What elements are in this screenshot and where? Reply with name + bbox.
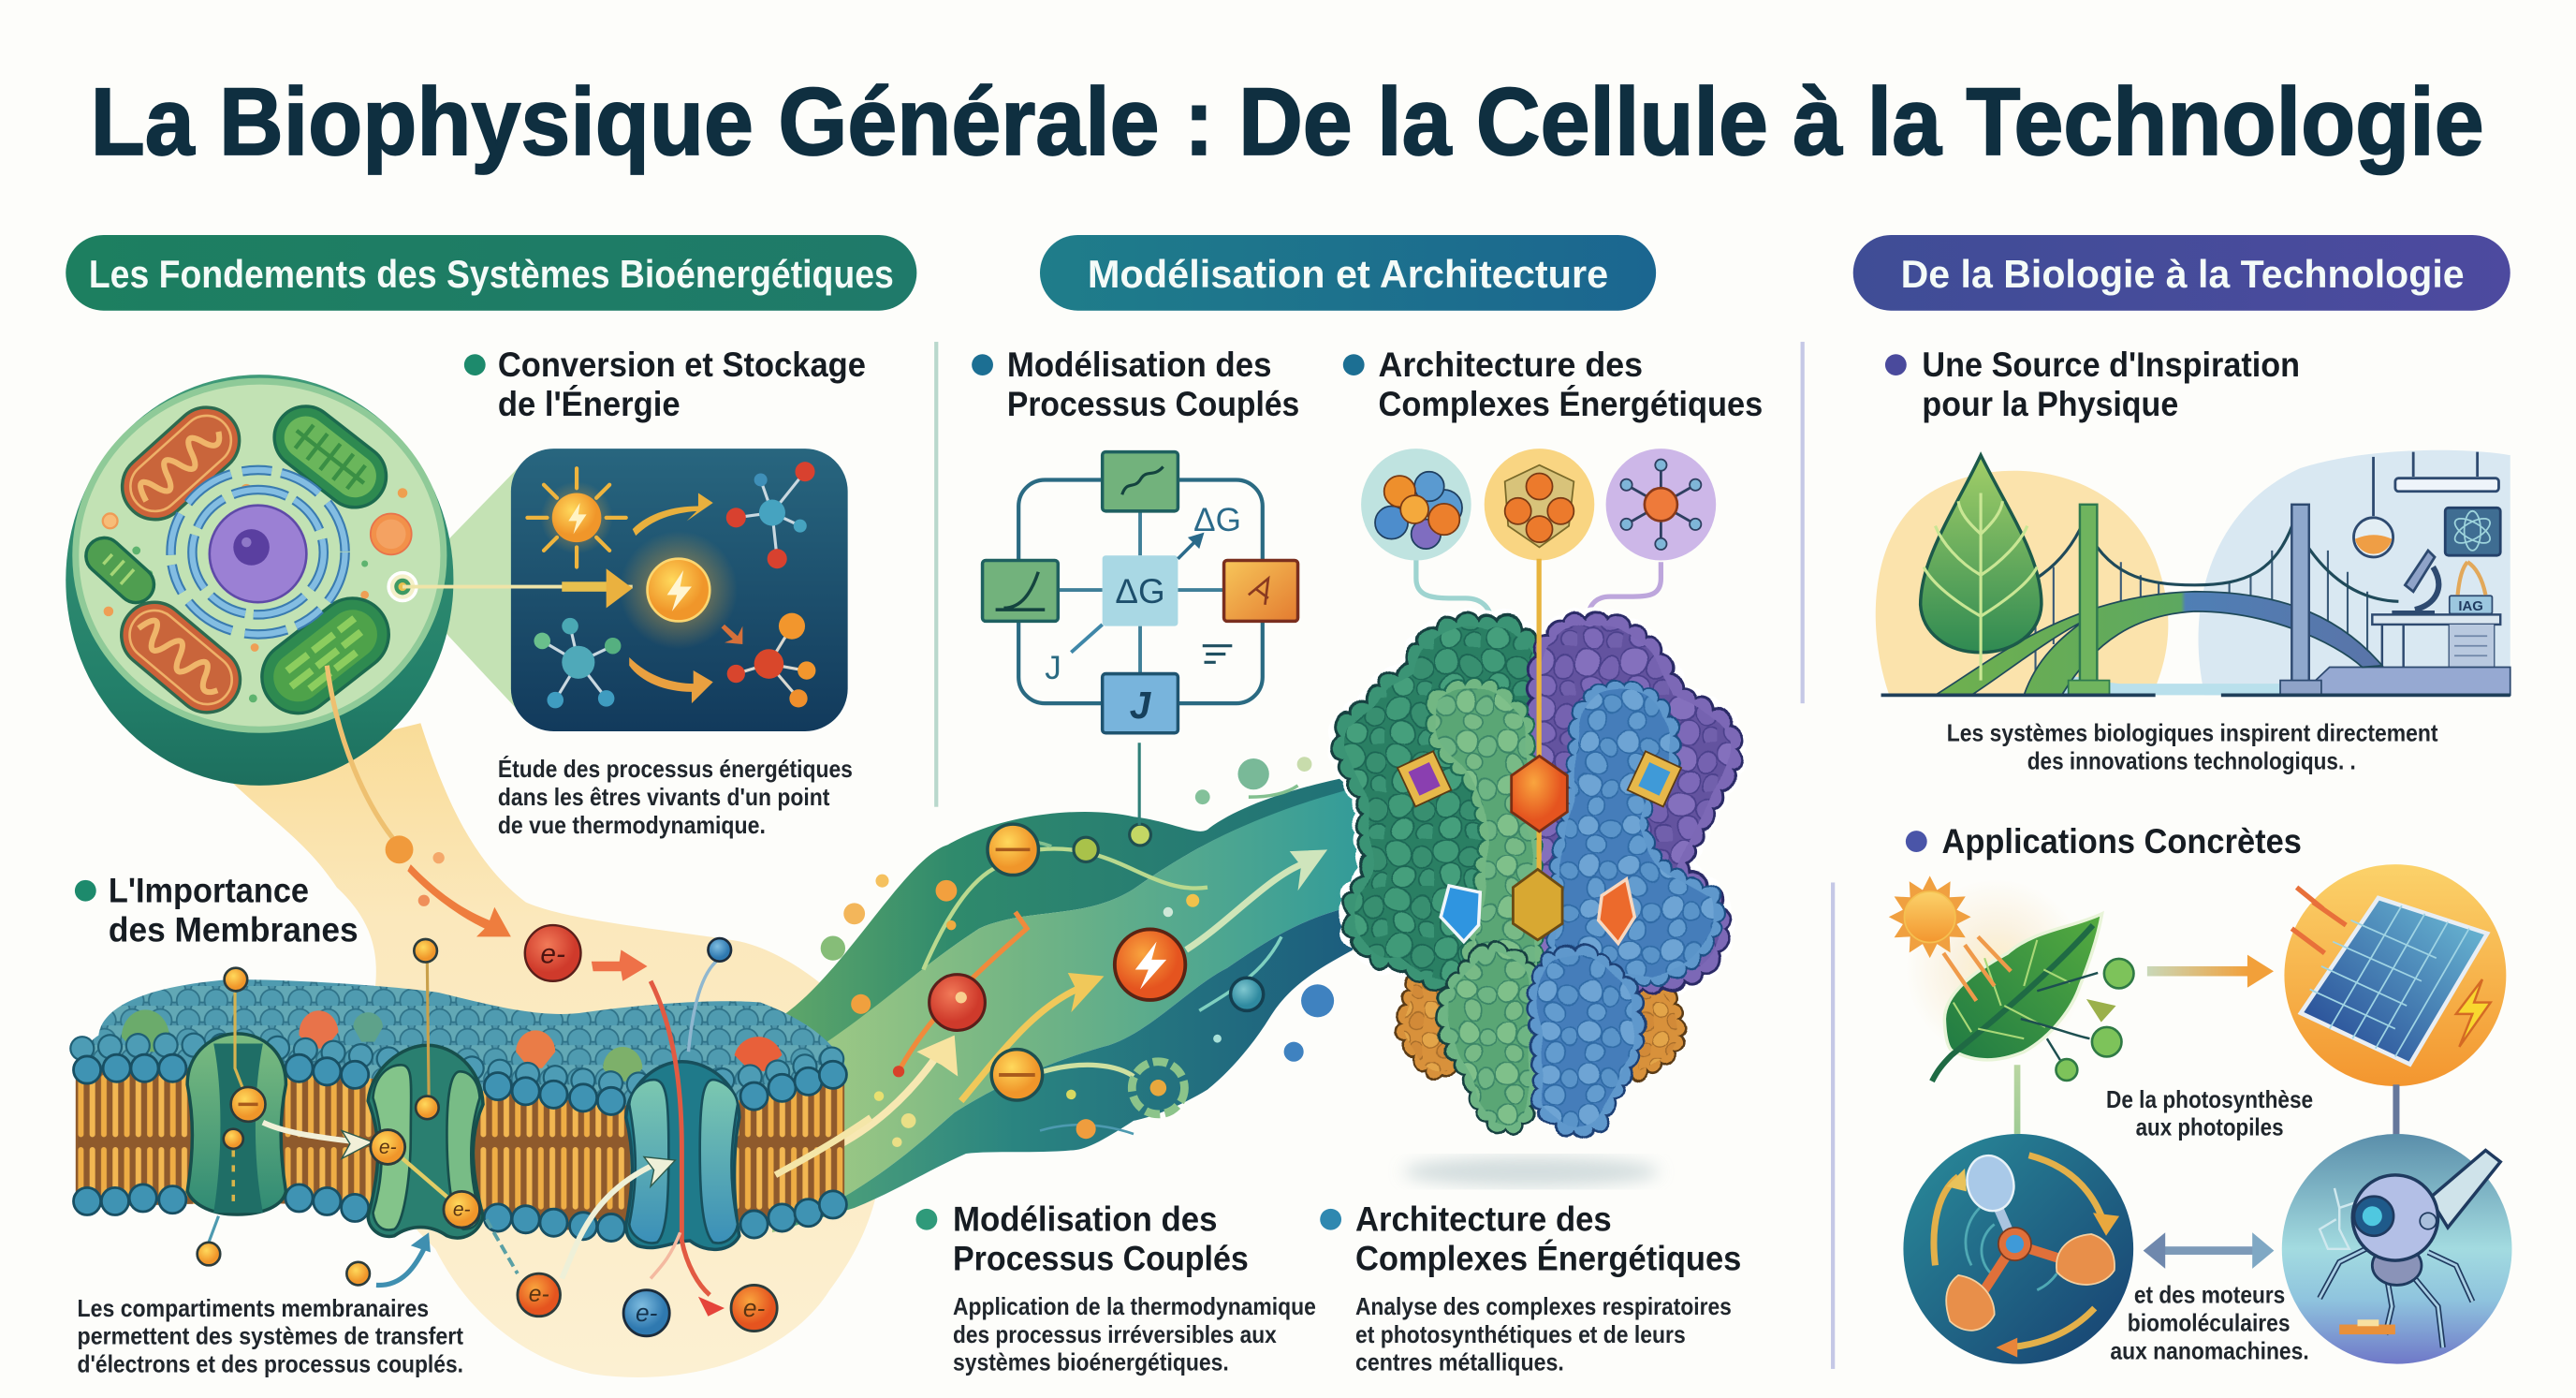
- body text: systèmes biologiques: [1947, 721, 2438, 774]
- chloroplast small: [79, 530, 161, 611]
- bullet and heading: inspiration: pour la Physique: [1922, 385, 2178, 423]
- bullet and heading: conversion: de l'Énergie: [498, 385, 681, 423]
- bullet and heading: inspiration: Une Source d'Inspiration: [1922, 346, 2300, 384]
- arrow: leaf to solar: [2147, 955, 2274, 988]
- section header: biologie technologie: De la Biologie à la Technologie: [1901, 252, 2465, 296]
- body text: analyse: et photosynthétiques et de leurs: [1355, 1322, 1686, 1348]
- bullet and heading: modélisation top: Processus Couplés: [1007, 385, 1299, 423]
- flow ribbon: [772, 773, 1380, 1232]
- protein shadow: [1403, 1157, 1660, 1186]
- section header: modélisation: Modélisation et Architecture: [1088, 252, 1608, 296]
- bullet and heading: conversion: Conversion et Stockage: [498, 346, 866, 384]
- body text: photosynthèse: [2106, 1087, 2313, 1141]
- icon: sun: [527, 468, 626, 567]
- head: [2352, 1175, 2438, 1260]
- flask: [2353, 457, 2393, 557]
- lightning: [2456, 979, 2491, 1047]
- iag label box: IAG: [2458, 599, 2483, 614]
- bullet and heading: modélisation bottom: Processus Couplés: [953, 1240, 1249, 1278]
- embedded proteins: [122, 1009, 782, 1082]
- body text: photosynthèse: aux photopiles: [2136, 1115, 2284, 1141]
- bullet and heading: modélisation top: Modélisation des: [1007, 346, 1271, 384]
- body text: application: Application de la thermodynamique: [953, 1294, 1316, 1320]
- zoom wedge: [402, 468, 518, 710]
- gem: orange: [1599, 879, 1634, 943]
- body text: étude: Étude des processus énergétiques: [498, 756, 853, 783]
- body text: moteurs: aux nanomachines.: [2110, 1338, 2309, 1364]
- section header: modélisation: [1040, 235, 1656, 311]
- bullet and heading: modélisation bottom: Modélisation des: [953, 1200, 1218, 1239]
- rotor arms: [1975, 1191, 2082, 1304]
- solar panel circle: [2284, 864, 2506, 1086]
- arrowheads: [342, 949, 724, 1317]
- wing: [2430, 1151, 2500, 1228]
- coupled process diagram: [983, 452, 1298, 825]
- cluster circle: teal: [1361, 449, 1471, 560]
- connectors: [2014, 1065, 2399, 1136]
- microscope: [2392, 551, 2438, 613]
- halo: [1344, 624, 1731, 983]
- inner blue: [1555, 689, 1713, 977]
- legs: [2320, 1249, 2472, 1347]
- double arrow: [2144, 1232, 2274, 1269]
- particles: e-: [529, 1282, 549, 1307]
- cell to membrane path: [327, 666, 511, 936]
- body text: compartiments: permettent des systèmes de transfert: [78, 1324, 463, 1350]
- endoplasmic reticulum: [171, 470, 345, 634]
- body text: systèmes biologiques: des innovations technologiqus. .: [2027, 748, 2356, 774]
- left dark green lobe: [1344, 626, 1539, 983]
- bullet and heading: applications: Applications Concrètes: [1942, 822, 2302, 861]
- spark: [2339, 1319, 2395, 1334]
- bullet and heading: membranes: [75, 872, 359, 949]
- arrow: sun to molecule: [633, 493, 713, 536]
- bullet and heading: architecture top: Complexes Énergétiques: [1379, 385, 1763, 423]
- lower green: [1447, 953, 1529, 1127]
- body text: analyse: Analyse des complexes respiratoires: [1355, 1294, 1732, 1320]
- body text: systèmes biologiques: Les systèmes biologiques inspirent directement: [1947, 721, 2438, 747]
- bridge illustration: [1876, 450, 2510, 695]
- body text: application: [953, 1294, 1316, 1376]
- box: bottom J: [1103, 674, 1178, 733]
- channel protein 2: [368, 1045, 483, 1238]
- bullet and heading: architecture top: [1343, 346, 1763, 423]
- gem: gold hexagon: [1513, 869, 1562, 940]
- bullet and heading: inspiration: [1885, 346, 2300, 423]
- lower blue: [1538, 955, 1634, 1126]
- panel: energy conversion: [402, 449, 848, 731]
- bullet and heading: membranes: L'Importance: [109, 872, 309, 910]
- arrow: ribbon pale: [813, 1052, 940, 1157]
- molecule top right: [726, 462, 815, 568]
- molecule bottom left: [534, 618, 621, 708]
- transport lines: [209, 962, 871, 1295]
- body text: étude: de vue thermodynamique.: [498, 813, 766, 839]
- icon: sun with leaf: [1889, 876, 2133, 1082]
- box: centre delta G: ΔG: [1115, 572, 1165, 611]
- body text: étude: dans les êtres vivants d'un point: [498, 785, 830, 811]
- label delta G: [1178, 502, 1241, 559]
- energy flow background band: [222, 723, 879, 1377]
- molecular motor circle: [1903, 1134, 2133, 1364]
- section header: fondements: [66, 235, 916, 311]
- body text: moteurs: [2110, 1283, 2309, 1364]
- box: top: [1103, 452, 1178, 511]
- molecule line art: [2320, 1188, 2354, 1249]
- molecules: [2021, 959, 2133, 1081]
- icon: energy core: [620, 531, 738, 649]
- gem: purple diamond: [1398, 751, 1451, 806]
- box: right: [1224, 560, 1298, 621]
- cluster circle: gold: [1485, 449, 1594, 560]
- section header: fondements: Les Fondements des Systèmes Bioénergétiques: [89, 252, 894, 296]
- platform: [2300, 668, 2510, 695]
- panel: [2301, 898, 2487, 1065]
- bullet and heading: membranes: des Membranes: [109, 911, 359, 949]
- body: [2372, 1245, 2422, 1285]
- mitochondrion top left: [109, 394, 253, 533]
- nanorobot circle: [2282, 1134, 2511, 1364]
- title: La Biophysique Générale : De la Cellule à la Technologie: [91, 68, 2484, 175]
- particles: e-: [636, 1299, 658, 1327]
- bullet and heading: architecture bottom: [1320, 1200, 1741, 1278]
- blue tower: [2280, 505, 2321, 695]
- suspenders: [2036, 551, 2367, 674]
- label J: J: [1045, 650, 1061, 686]
- box: centre delta G: [1103, 555, 1178, 626]
- desk: [2372, 614, 2500, 668]
- water: [2037, 677, 2317, 695]
- particles: e-: [379, 1137, 397, 1158]
- bullet and heading: modélisation bottom: [915, 1200, 1249, 1278]
- nucleus: [210, 506, 306, 602]
- arrow: lower yellow: [629, 657, 713, 703]
- lipid heads: [74, 1054, 846, 1242]
- protein complex: [1344, 559, 1731, 1127]
- bullet and heading: architecture bottom: Complexes Énergétiques: [1355, 1240, 1741, 1278]
- channel protein 3: [626, 1062, 739, 1249]
- chloroplast top right: [262, 394, 399, 520]
- ground line: [1881, 694, 2510, 696]
- body text: compartiments: d'électrons et des processus couplés.: [78, 1351, 463, 1377]
- gem: centre hexagon: [1512, 756, 1567, 831]
- yellow blob: [1876, 471, 2168, 695]
- leaf: [1921, 455, 2042, 681]
- leaf: [1932, 914, 2102, 1082]
- particles: [198, 925, 777, 1336]
- deck: [1935, 592, 2382, 695]
- body text: moteurs: biomoléculaires: [2128, 1311, 2291, 1337]
- orange lobes: [1405, 980, 1676, 1079]
- body text: moteurs: et des moteurs: [2134, 1283, 2285, 1309]
- gold spine: [1538, 559, 1541, 871]
- body text: étude: [498, 756, 853, 839]
- inner light green: [1436, 688, 1533, 964]
- body text: application: des processus irréversibles aux: [953, 1322, 1277, 1348]
- bullet and heading: modélisation top: [972, 346, 1299, 423]
- body text: application: systèmes bioénergétiques.: [953, 1350, 1229, 1376]
- bullet and heading: architecture bottom: Architecture des: [1355, 1200, 1612, 1239]
- mitochondrion bottom left: [108, 589, 254, 726]
- arrow: marker to charge: [562, 568, 633, 608]
- body text: analyse: centres métalliques.: [1355, 1350, 1564, 1376]
- body text: photosynthèse: De la photosynthèse: [2106, 1087, 2313, 1113]
- blue blob: [2199, 450, 2510, 695]
- molecule bottom right: [727, 613, 815, 708]
- box: bottom J: J: [1130, 684, 1152, 727]
- particles: e-: [453, 1199, 471, 1221]
- iag label box: [2450, 562, 2492, 614]
- cluster circle: purple: [1606, 449, 1716, 560]
- bullet and heading: architecture top: Architecture des: [1379, 346, 1643, 384]
- gem: blue: [1441, 886, 1480, 942]
- connector lines: [1416, 559, 1661, 625]
- body text: analyse: [1355, 1294, 1732, 1376]
- sun rays: [2291, 888, 2346, 953]
- particles: e-: [743, 1294, 766, 1322]
- green tower: [2069, 505, 2110, 695]
- box: left: [983, 560, 1058, 621]
- cable: [1982, 522, 2398, 603]
- marker: [388, 573, 417, 600]
- hanging lamp: [2395, 452, 2498, 492]
- gem: blue diamond: [1628, 751, 1681, 806]
- sun: [1889, 876, 1971, 958]
- cell illustration: [66, 375, 453, 786]
- label delta G: ΔG: [1193, 502, 1241, 538]
- body text: compartiments: Les compartiments membranaires: [78, 1296, 429, 1322]
- body text: compartiments: [78, 1296, 463, 1377]
- floating droplets: [821, 757, 1334, 1062]
- protein body: [1344, 624, 1731, 1127]
- note lines: [1203, 646, 1232, 662]
- right purple lobe: [1539, 624, 1731, 983]
- atom screen: [2445, 508, 2500, 555]
- channel protein 1: [187, 1034, 285, 1214]
- label J: [1045, 625, 1103, 686]
- particles: e-: [540, 938, 565, 969]
- bullet and heading: conversion: [464, 346, 866, 423]
- chloroplast bottom right: [247, 583, 403, 728]
- arrow: small orange: [722, 625, 742, 644]
- section header: biologie technologie: [1853, 235, 2510, 311]
- membrane bilayer: [74, 925, 871, 1336]
